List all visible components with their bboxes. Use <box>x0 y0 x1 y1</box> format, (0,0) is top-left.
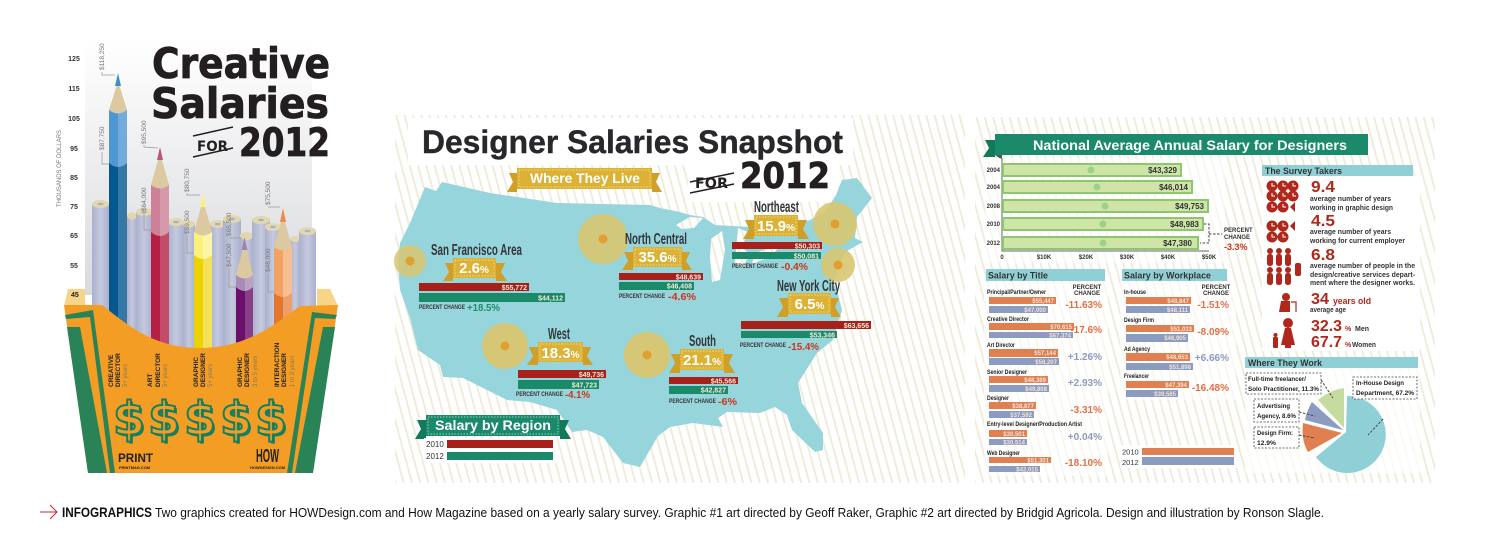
region: north central: -4.6% <box>668 292 696 303</box>
pencil: graphic designer 5+ years <box>194 195 212 360</box>
job labels: 5+ years <box>123 364 129 387</box>
region: new york city: New York City <box>777 278 840 295</box>
pencil: art director <box>151 147 169 360</box>
title: creative salaries for 2012: 2012 <box>239 121 330 166</box>
chart: annual salary bars: $46,014 <box>1159 183 1189 192</box>
section: salary by workplace: -1.51% <box>1197 300 1229 311</box>
section: salary by workplace: $51,033 <box>1170 327 1193 333</box>
section: salary by workplace: -8.09% <box>1197 327 1229 338</box>
region: south: 21.1% <box>683 352 721 369</box>
y axis scale: 105 <box>68 116 80 123</box>
region: west: $47,723 <box>572 382 597 390</box>
job labels: DIRECTOR <box>155 353 162 387</box>
section: salary by title: Senior Designer <box>987 369 1027 376</box>
section: salary by title: $47,000 <box>1024 308 1047 314</box>
job labels: DESIGNER <box>281 353 288 387</box>
section: salary by workplace <box>1120 269 1236 400</box>
section: the survey takers: design/creative services depart- <box>1310 272 1416 279</box>
caption: Two graphics created for HOWDesign.com and How Magazine based on a yearly salary survey. Graphic #1 art directed by Geoff Raker, Graphic #2 art directed by Bridgid Agricola. Design and illustration by Ronson Slagle. <box>155 505 1324 520</box>
job labels: DESIGNER <box>244 353 251 387</box>
region: new york city <box>740 248 871 353</box>
section: salary by title: Web Designer <box>987 450 1020 457</box>
section: salary by title <box>984 269 1108 476</box>
section: the survey takers <box>1262 165 1420 351</box>
logo: how: HOWDESIGN.COM <box>250 465 286 470</box>
section: salary by title: $57,144 <box>1034 351 1057 357</box>
pie callouts: Agency, 8.6% <box>1257 413 1296 420</box>
job labels: INTERACTION <box>274 342 281 387</box>
section: the survey takers: 67.7 <box>1311 334 1342 351</box>
icon: clocks 9.4 years <box>1266 180 1298 212</box>
y axis scale <box>56 56 80 270</box>
icon: woman and man <box>1273 318 1295 348</box>
section: salary by workplace: Salary by Workplace <box>1124 270 1211 282</box>
salary leader labels <box>99 43 280 292</box>
region: south: $45,566 <box>711 378 736 386</box>
pie callouts: Advertising <box>1257 403 1290 410</box>
y axis scale: 115 <box>68 86 80 93</box>
region: northeast: 15.9% <box>757 218 795 235</box>
chart: annual salary bars: CHANGE <box>1224 235 1250 241</box>
region: north central: PERCENT CHANGE <box>619 294 665 300</box>
section: the survey takers: 6.8 <box>1311 247 1335 264</box>
title: for 2012 <box>690 156 830 197</box>
region: west: $49,736 <box>579 372 604 379</box>
section: salary by title: $30,501 <box>1003 432 1026 438</box>
salary leader labels: $59,500 <box>184 210 191 234</box>
pie callouts: Full-time freelancer/ <box>1248 376 1306 383</box>
section: the survey takers: Women <box>1352 342 1376 349</box>
chart: annual salary bars: 2008 <box>987 204 1001 210</box>
icons: dollar signs: $ <box>255 392 287 446</box>
heading ribbon: salary by region: Salary by Region <box>435 417 551 433</box>
job labels: 3 to 5 years <box>253 356 259 387</box>
section: the survey takers: ment where the designer works. <box>1310 280 1415 287</box>
section: salary by title: Art Director <box>987 342 1015 349</box>
salary leader labels: $47,500 <box>226 243 233 267</box>
heading ribbon: where they live <box>507 168 662 192</box>
region: northeast: $50,081 <box>794 254 819 260</box>
chart: annual salary bars: PERCENT <box>1224 228 1253 234</box>
region: san francisco area <box>394 242 565 314</box>
icons: dollar signs: $ <box>186 394 218 448</box>
section: salary by title: -17.6% <box>1070 325 1102 336</box>
section: salary by title: $70,615 <box>1050 325 1073 331</box>
chart: annual salary bars: -3.3% <box>1224 242 1248 252</box>
region: northeast: Northeast <box>754 199 799 216</box>
section: the survey takers: 9.4 <box>1311 179 1335 196</box>
legend: workplace years: 2012 <box>1122 458 1139 467</box>
pie callouts <box>1246 373 1417 448</box>
job labels: GRAPHIC <box>193 357 200 387</box>
section: salary by workplace: PERCENT <box>1202 285 1231 291</box>
section: salary by title: $55,447 <box>1032 299 1055 305</box>
region: northeast: PERCENT CHANGE <box>732 264 778 270</box>
section: salary by workplace: $51,898 <box>1169 365 1192 371</box>
title: for 2012: 2012 <box>740 156 830 197</box>
heading ribbon: salary by region <box>415 415 571 439</box>
region: north central: $48,639 <box>676 274 701 282</box>
section: the survey takers: 34 <box>1311 291 1329 308</box>
section: salary by title: Principal/Partner/Owner <box>987 289 1046 296</box>
map of united states <box>398 178 872 467</box>
section: salary by workplace: $47,394 <box>1165 383 1188 389</box>
chart: annual salary bars: $43,329 <box>1148 166 1178 175</box>
section: the survey takers: working for current employer <box>1309 238 1405 245</box>
section: the survey takers: The Survey Takers <box>1265 166 1342 177</box>
section: salary by title: +1.26% <box>1068 352 1102 363</box>
pencil: creative director <box>109 73 127 360</box>
section: salary by title: +0.04% <box>1068 432 1102 443</box>
icon: people 6.8 staff <box>1267 248 1301 285</box>
section: salary by title: $48,389 <box>1024 378 1047 384</box>
logo: how: HOW <box>256 446 279 466</box>
section: salary by workplace: In-house <box>1124 289 1146 296</box>
region: north central: $46,408 <box>667 284 692 290</box>
section: salary by title: $67,374 <box>1049 334 1072 340</box>
salary leader labels: $80,750 <box>184 168 191 192</box>
section: the survey takers: % <box>1345 326 1352 333</box>
region: south: South <box>689 333 716 350</box>
region: west <box>482 323 606 401</box>
salary leader labels: $64,000 <box>141 187 148 211</box>
job labels: 5+ years <box>208 364 214 387</box>
pie callouts: 12.9% <box>1257 440 1276 447</box>
icons: dollar signs: $ <box>184 392 216 446</box>
region: northeast: $50,303 <box>795 244 820 250</box>
chart: annual salary bars: $49,753 <box>1175 202 1205 211</box>
icon: person with cane <box>1279 293 1296 312</box>
chart: annual salary bars: 2004 <box>987 168 1001 174</box>
section: salary by title: Entry-level Designer/Production Artist <box>987 421 1083 428</box>
section: the survey takers: average number of years <box>1310 196 1391 203</box>
icons: dollar signs <box>113 392 289 448</box>
icons: dollar signs: $ <box>257 394 289 448</box>
chart: annual salary bars: 2004 <box>987 185 1001 191</box>
job labels: 1 to 3 years <box>290 356 296 387</box>
logo: how <box>250 446 286 470</box>
region: south <box>624 332 738 408</box>
section: salary by workplace: +6.66% <box>1195 353 1229 364</box>
region: north central: 35.6% <box>638 249 677 266</box>
section: salary by workplace: $39,585 <box>1154 392 1177 398</box>
region: san francisco area: PERCENT CHANGE <box>419 305 465 311</box>
logo: print: PRINTMAG.COM <box>119 465 151 470</box>
section: salary by title: $38,877 <box>1012 404 1035 410</box>
panel: creative salaries graphic <box>56 39 338 473</box>
region: san francisco area: +18.5% <box>467 303 500 314</box>
chart: annual salary bars: $48,983 <box>1170 220 1200 229</box>
fry box container <box>64 289 338 473</box>
icons: dollar signs: $ <box>113 392 145 446</box>
pie callouts: In-House Design <box>1356 380 1404 387</box>
section: the survey takers: average age <box>1310 307 1346 314</box>
gray background pencils <box>92 200 316 356</box>
section: the survey takers: Men <box>1355 326 1369 333</box>
chart: annual salary bars <box>985 158 1253 263</box>
section: salary by workplace: $48,653 <box>1166 355 1189 361</box>
section: salary by title: -18.10% <box>1065 458 1102 469</box>
y axis scale: 95 <box>70 146 78 153</box>
region: san francisco area: 2.6% <box>459 260 489 277</box>
chart: annual salary bars: $10K <box>1037 255 1052 261</box>
chart: annual salary bars: 2010 <box>987 222 1001 228</box>
title: creative salaries for 2012: Salaries <box>151 79 329 128</box>
heading ribbon: where they live: Where They Live <box>530 170 640 186</box>
chart: annual salary bars: $20K <box>1079 255 1094 261</box>
region: south: PERCENT CHANGE <box>669 399 716 405</box>
section: salary by workplace: $46,905 <box>1164 336 1187 342</box>
icon: red arrow <box>40 505 57 519</box>
section: salary by workplace: -16.48% <box>1192 383 1229 394</box>
logo: print: PRINT <box>118 451 154 465</box>
job labels: GRAPHIC <box>237 357 244 387</box>
section: the survey takers: working in graphic design <box>1309 205 1393 212</box>
y axis scale: 65 <box>70 233 78 240</box>
icons: dollar signs: $ <box>222 394 254 448</box>
heading ribbon: national average annual salary: National Average Annual Salary for Designers <box>1033 137 1347 153</box>
caption: INFOGRAPHICS <box>62 504 152 520</box>
region: north central: North Central <box>625 231 687 248</box>
section: salary by title: $58,207 <box>1035 360 1058 366</box>
salary leader labels: $48,000 <box>265 248 272 272</box>
chart: annual salary bars: $50K <box>1202 255 1217 261</box>
y axis scale: THOUSANDS OF DOLLARS <box>56 129 63 207</box>
section: the survey takers: average number of years <box>1310 229 1391 236</box>
section: the survey takers: 32.3 <box>1311 318 1342 335</box>
section: salary by workplace: Freelancer <box>1124 373 1149 380</box>
section: salary by title: $37,592 <box>1010 413 1033 419</box>
section: salary by title: $51,301 <box>1027 458 1050 464</box>
job labels <box>108 342 296 387</box>
section: salary by title: Creative Director <box>987 316 1029 323</box>
section: salary by title: $49,808 <box>1025 387 1048 393</box>
section: salary by title: PERCENT <box>1073 285 1102 291</box>
title: designer salaries snapshot: Designer Salaries Snapshot <box>422 124 843 160</box>
region: west: 18.3% <box>541 345 580 362</box>
section: salary by title: Designer <box>987 395 1009 402</box>
job labels: CREATIVE <box>108 354 115 387</box>
section: salary by workplace: Design Firm <box>1124 317 1154 324</box>
pie callouts: Department, 67.2% <box>1356 390 1414 397</box>
section: the survey takers: % <box>1345 342 1352 349</box>
pencil: graphic designer 3 to 5 years <box>236 237 253 360</box>
region: new york city: $63,656 <box>844 323 869 330</box>
heading ribbon: national average annual salary <box>983 134 1368 160</box>
title: creative salaries for 2012: FOR <box>197 139 228 155</box>
region: new york city: -15.4% <box>788 342 819 353</box>
legend: region years: 2010 <box>426 440 444 449</box>
chart: annual salary bars: 2012 <box>987 241 1001 247</box>
title: for 2012: FOR <box>695 176 728 192</box>
icons: dollar signs: $ <box>148 392 180 446</box>
region: west: West <box>548 326 570 343</box>
job labels: 5+ years <box>163 364 169 387</box>
section: salary by title: CHANGE <box>1074 291 1100 297</box>
legend: workplace years: 2010 <box>1122 448 1139 456</box>
icons: dollar signs: $ <box>115 394 147 448</box>
section: the survey takers: average number of people in the <box>1310 263 1415 270</box>
job labels: ART <box>147 374 154 387</box>
chart: annual salary bars: $40K <box>1161 255 1176 261</box>
region: san francisco area: San Francisco Area <box>431 242 522 259</box>
y axis scale: 55 <box>70 263 78 270</box>
fry box container: 45 <box>71 292 79 299</box>
chart: annual salary bars: $30K <box>1120 255 1135 261</box>
job labels: DIRECTOR <box>115 353 122 387</box>
region: san francisco area: $55,772 <box>502 285 527 292</box>
region: north central <box>578 214 703 303</box>
section: where they work <box>1245 357 1420 473</box>
region: northeast: -0.4% <box>781 262 808 273</box>
region: new york city: 6.5% <box>795 296 824 313</box>
icon: clocks 4.5 years <box>1266 220 1295 242</box>
title: creative salaries for 2012: Creative <box>152 39 330 88</box>
region: south: -6% <box>718 397 737 408</box>
salary leader labels: $65,500 <box>226 212 233 236</box>
chart: annual salary bars: 0 <box>1000 255 1004 261</box>
section: salary by title: +2.93% <box>1068 378 1102 389</box>
pie chart <box>1303 388 1386 473</box>
y axis scale: 85 <box>70 175 78 182</box>
section: where they work: Where They Work <box>1248 358 1323 369</box>
chart: annual salary bars: $47,380 <box>1163 239 1193 248</box>
y axis scale: 75 <box>70 204 78 211</box>
panel: designer salaries snapshot <box>394 115 965 483</box>
salary leader labels: $95,500 <box>141 120 148 144</box>
salary leader labels: $75,500 <box>265 181 272 205</box>
section: salary by workplace: CHANGE <box>1203 291 1229 297</box>
icons: dollar signs: $ <box>220 392 252 446</box>
section: salary by title: $30,514 <box>1003 440 1026 446</box>
section: salary by title: $42,015 <box>1016 468 1039 474</box>
section: salary by title: -3.31% <box>1070 405 1102 416</box>
job labels: DESIGNER <box>200 353 207 387</box>
region: south: $42,827 <box>701 388 726 394</box>
icons: dollar signs: $ <box>150 394 182 448</box>
section: salary by workplace: $48,847 <box>1167 299 1190 305</box>
region: west: -4.1% <box>565 390 590 401</box>
salary leader labels: $118,250 <box>99 43 106 70</box>
region: new york city: PERCENT CHANGE <box>740 343 786 349</box>
section: the survey takers: 4.5 <box>1311 213 1335 230</box>
section: salary by workplace: Ad Agency <box>1124 346 1150 353</box>
pie callouts: Design Firm: <box>1257 430 1293 437</box>
salary leader labels: $87,750 <box>99 126 106 150</box>
pie callouts: Solo Practitioner, 11.3% <box>1248 386 1319 393</box>
y axis scale: 125 <box>68 56 80 63</box>
region: northeast <box>732 199 857 273</box>
legend: region years: 2012 <box>426 452 444 461</box>
region: san francisco area: $44,112 <box>538 296 563 302</box>
legend: region years <box>424 438 556 463</box>
title: creative salaries for 2012 <box>151 39 330 166</box>
section: the survey takers: years old <box>1333 296 1371 306</box>
region: west: PERCENT CHANGE <box>516 392 563 398</box>
legend: workplace years <box>1120 445 1236 468</box>
pencil: interaction designer <box>274 208 292 360</box>
section: salary by title: Salary by Title <box>988 270 1048 282</box>
section: salary by title: -11.63% <box>1065 300 1102 311</box>
section: salary by workplace: $48,111 <box>1167 308 1189 314</box>
region: new york city: $53,346 <box>810 332 835 340</box>
panel: national average salary <box>975 117 1435 483</box>
